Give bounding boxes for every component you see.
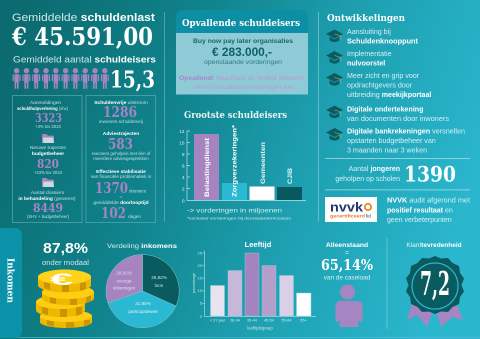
icon: graduation hat [326,128,343,141]
text: dossiers in behandeling [18,190,76,219]
pie labels: overige [116,278,132,284]
slice: participatiewet [108,291,176,328]
text: aanmeldingen [17,100,68,129]
y axis labels: 20 [198,263,203,268]
bar: gemeenten [250,186,274,200]
heading: ontwikkelingen: Ontwikkelingen [327,14,405,24]
text: adviestrajecten: meerdere adviesgesprekken [93,156,149,161]
text: effectieve stabilisatie: Effectieve stabilisatie [96,169,146,175]
text: effectieve stabilisatie: = [120,194,123,199]
list: ontwikkelingen [326,28,465,154]
text: digitale bankrekeningen: 3 maanden naar 3 weken [347,146,427,154]
stat: alleenstaand: 65,14% [321,257,373,274]
stat: alleenstaand: van de caseload [324,274,371,282]
text: aantal jongeren: geholpen op scholen [335,176,400,183]
big number: schuldenlast: € 45.591,00 [11,22,153,51]
text: adviestrajecten: 583 [108,135,133,153]
text: nieuwe trajecten budgetbeheer: 820 [37,156,59,171]
bar: cjib [277,187,302,200]
slice: loon [142,254,179,306]
text: meekijkportaal: opdrachtgevers door [347,82,413,90]
icon: graduation hat [326,106,343,118]
x axis labels: 65+ [300,318,308,322]
icon: person [335,284,362,327]
chart: grootste schuldeisers [179,111,306,220]
text: adviestrajecten: Adviestrajecten [103,131,139,137]
axis labels: 0 [182,198,185,204]
text: nvvk audit: NVVK audit afgerond met [387,198,470,204]
bar: zorgverzekeringen [222,183,247,200]
text: nulvoorstel [347,50,392,68]
axes [202,250,316,316]
text: schuldenknooppunt [347,28,419,46]
pie labels: participatiewet [128,309,158,314]
y axis labels: 5 [200,300,203,306]
icon: stack of euro coins [36,270,94,328]
logo: nvvk gecertificeerd [325,197,377,222]
text: buy now pay later [193,38,294,66]
text: doorlooptijd [93,200,149,222]
pie labels: 29,82% [151,275,167,280]
x axis labels: 28-34 [230,318,241,322]
text: nvvk audit [387,198,470,224]
text: effectieve stabilisatie: 1370 [95,179,128,197]
text: buy now pay later: openstaande vorderingen [204,60,282,66]
text: schuldenvrije uitstroom: inwoners schuldenvrij [99,119,143,124]
text: aanmeldingen: 3323 [35,110,62,125]
bar labels: CJIB [287,168,294,184]
text: opvallend [179,76,305,91]
text: aanmeldingen: Aanmeldingen [30,100,61,106]
axis labels: 6 [182,164,185,168]
heading: grootste schuldeisers: Grootste schuldeisers [184,111,287,121]
y axis labels: 10 [198,288,203,293]
stat: onder modaal: 87,8% [43,241,88,257]
euro sign: € [50,270,74,289]
text: adviestrajecten [92,131,151,161]
big number: 1390: 1390 [404,162,456,186]
axis labels: 12 [179,129,185,134]
bar: belastingdienst [194,134,219,200]
panel: opvallende schuldeisers [176,10,308,94]
x axis labels: < 27 jaar [210,318,226,322]
text: opvallend: neemt het aantal vorderingen toe [193,85,294,91]
panel: aanmeldingen en dossiers [12,96,82,222]
pie labels: loon [155,283,164,288]
text: nulvoorstel: Implementatie [347,50,392,58]
text: nieuwe trajecten budgetbeheer [30,145,66,175]
axis labels: 8 [182,152,185,157]
pie labels [113,270,167,314]
text: aantal jongeren: Aantal jongeren [349,166,400,173]
bar labels: Belastingdienst [204,137,211,197]
stat: alleenstaand: Alleenstaand [326,242,368,249]
x axis labels [210,318,308,322]
heading: opvallende schuldeisers: Opvallende schuldeisers [182,19,300,29]
text: opvallend: Opvallend! Naarmate de leeftijd afneemt, [179,76,305,82]
text: dossiers in behandeling: Aantal dossiers [31,190,65,196]
text: schuldenvrije uitstroom: Schuldenvrije uitstroom [94,100,148,106]
y axis labels: 0 [200,314,203,319]
icon: graduation hat [326,30,343,42]
y axis labels: 15 [198,276,203,280]
text: effectieve stabilisatie: dossiers [129,188,147,194]
text: effectieve stabilisatie: van financiële problematiek in [91,174,152,179]
text: digitale ondertekening: van documenten door inwoners [347,115,449,123]
bar labels: Zorgverzekeringen* [232,124,238,197]
text: dossiers in behandeling: (SHV + budgetbeheer) [27,214,70,219]
note: exclusief: *exclusief vorderingen bij deurwaarder/incasso [187,216,291,220]
text: nieuwe trajecten budgetbeheer: budgetbeheer [32,151,64,157]
text: dossiers in behandeling: in behandeling (geweest) [18,196,76,202]
y axis labels [198,250,203,319]
panel: uitstroom en advies [86,96,156,222]
pie labels: 31,85% [135,301,151,306]
note: vorderingen in miljoenen: -> vorderingen in miljoenen [187,208,282,214]
text: digitale ondertekening [347,106,449,123]
text: doorlooptijd: 102 [101,204,126,222]
heading: gemiddelde schuldenlast: Gemiddelde schuldenlast [12,12,155,24]
tab: inkomen: Inkomen [4,258,14,303]
x axis labels: 35-44 [247,318,258,322]
axis labels [179,129,185,204]
axis labels: 10 [179,140,185,146]
big number: aantal schuldeisers: 15,3 [110,66,155,94]
text: nulvoorstel: nulvoorstel [347,60,385,68]
slice: overige uitkeringen [106,254,142,303]
text: schuldenknooppunt: Aansluiting bij [347,28,391,36]
icon: graduation hat [326,51,343,64]
score: 7,2 [420,264,450,303]
heading: leeftijd: Leeftijd [245,240,272,249]
text: doorlooptijd: gemiddelde doorlooptijd [93,200,149,206]
icon: graduation hat [326,73,343,86]
stat: onder modaal [42,241,89,267]
stat: alleenstaand [321,242,373,282]
text: meekijkportaal: uitbreiding meekijkportaal [347,91,431,99]
text: digitale bankrekeningen: Digitale bankrekeningen versnellen [347,128,465,136]
heading: klanttevredenheid: Klanttevredenheid [406,242,462,249]
text: schuldenvrije uitstroom: 1286 [103,103,137,121]
ribbons [407,300,434,327]
text: meekijkportaal [347,72,431,99]
axis title: leeftijdsgroep: leeftijdsgroep [247,326,273,330]
pie labels: uitkeringen [113,286,136,290]
heading: verdeling inkomens: Verdeling inkomens [107,243,177,250]
bar labels [204,124,294,197]
rosette [406,256,464,314]
x axis labels: 45-54 [264,318,275,322]
text: effectieve stabilisatie [91,169,152,199]
chart: leeftijd [191,240,316,330]
heading: aantal schuldeisers: Gemiddeld aantal schuldeisers [13,54,156,64]
text: nvvk audit: geen verbeterpunten [387,217,452,224]
panel header [176,10,308,33]
pie labels: 29,82% [116,270,132,276]
text: aanmeldingen: schuldhulpverlening (shv) [17,106,68,112]
text: doorlooptijd: dagen [128,214,141,219]
axis labels: 2 [182,186,185,192]
text: meekijkportaal: Meer zicht en grip voor [347,72,420,80]
text: dossiers in behandeling: 8449 [33,200,63,215]
text: digitale bankrekeningen [347,128,465,154]
axes [187,131,306,200]
text: aanmeldingen: +3% tov 2023 [35,124,62,129]
icon: rosette with score [406,256,464,327]
text: nieuwe trajecten budgetbeheer: Nieuwe trajecten [30,145,66,151]
logo: nvvk gecertificeerd: gecertificeerd [330,214,365,220]
text: nvvk audit: positief resultaat en [387,208,453,214]
logo: nvvk gecertificeerd: nvvk [330,200,363,214]
text: buy now pay later: € 283.000,- [212,47,272,59]
logo: nvvk gecertificeerd: lid [366,214,371,220]
x axis labels: 55-64 [282,318,292,322]
text: nieuwe trajecten budgetbeheer: +23% tov 2023 [34,170,63,175]
stat: alleenstaand: = [345,250,349,256]
axis labels: 4 [182,175,185,180]
text: aantal jongeren [335,166,400,183]
text: adviestrajecten: inwoners geholpen met één of [92,151,151,156]
text: digitale ondertekening: Digitale ondertekening [347,106,423,114]
y axis labels: 25 [198,250,203,256]
axis title: percentage: percentage [191,272,196,293]
bar labels: Gemeenten [260,142,267,184]
text: buy now pay later: Buy now pay later organisaties [193,38,294,45]
icon row: ten people [13,68,109,89]
icon: folder [42,178,54,187]
icon: folder [42,134,54,143]
tab: inkomen [0,228,22,338]
bars [210,253,311,316]
chart: verdeling inkomens [106,243,179,328]
text: schuldenknooppunt: Schuldenknooppunt [347,38,419,46]
text: schuldenvrije uitstroom [94,100,148,124]
stat: onder modaal: onder modaal [42,260,89,267]
text: digitale bankrekeningen: opstarten budgetbeheer van [347,137,436,145]
